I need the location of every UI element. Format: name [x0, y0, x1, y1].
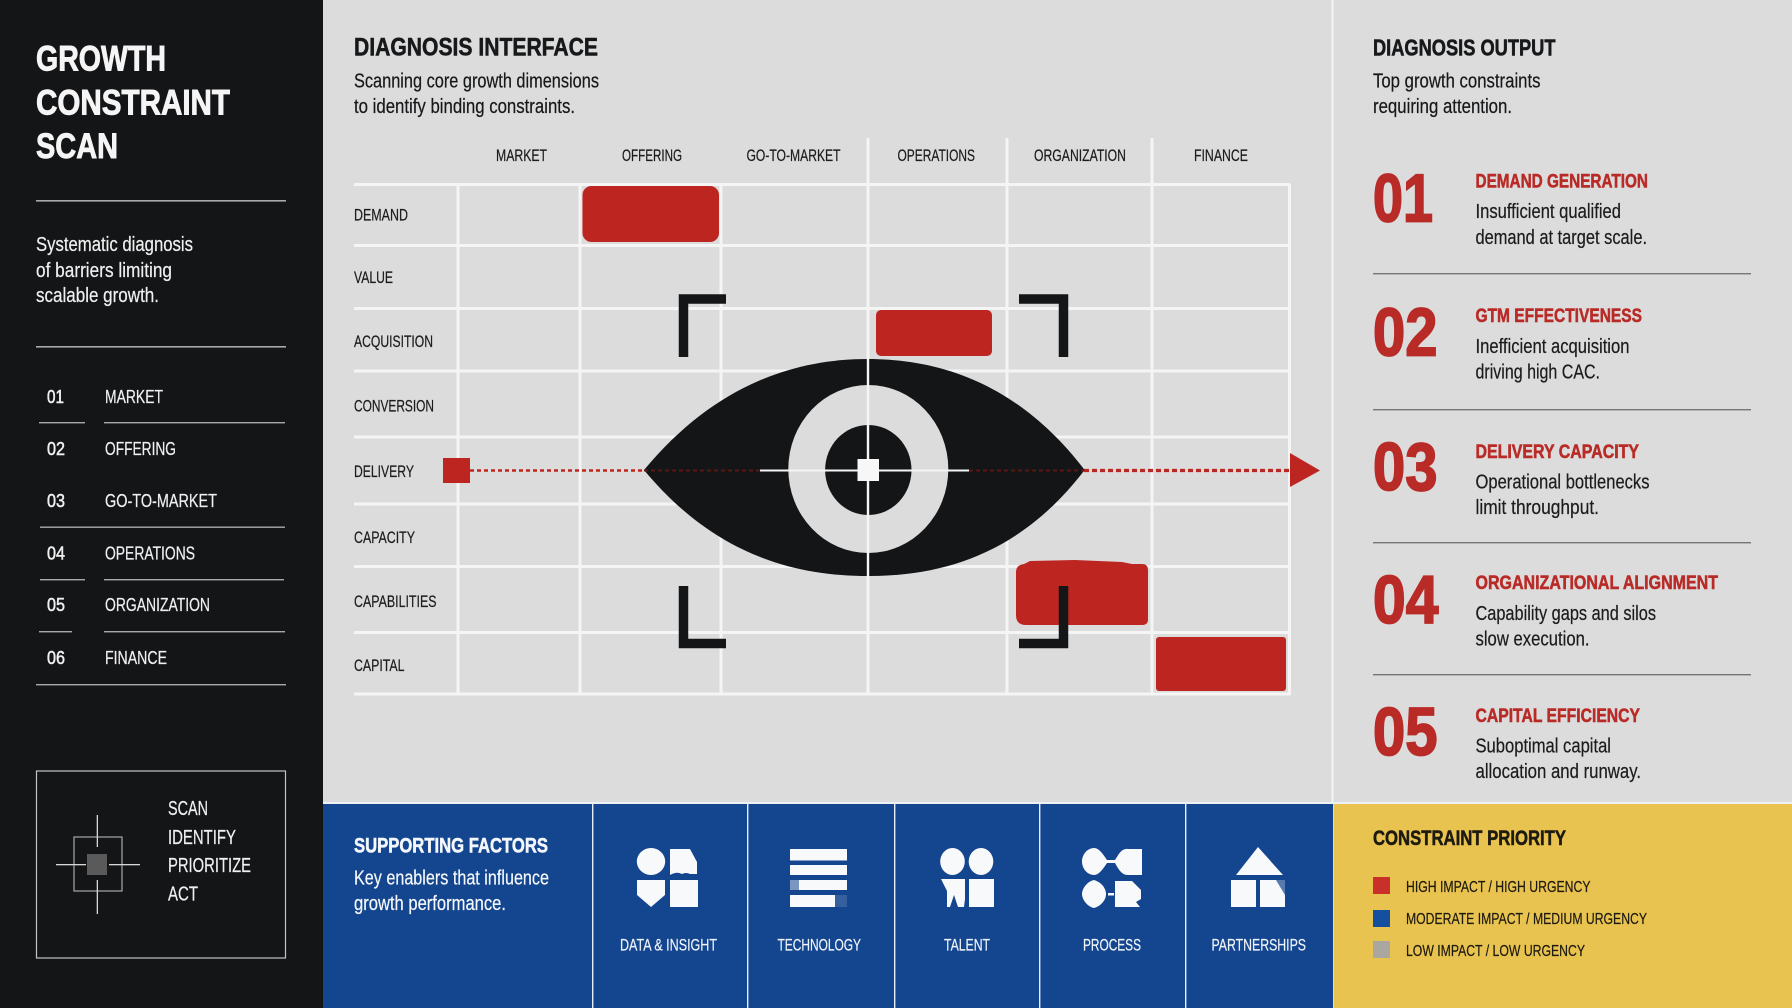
legend: MODERATE IMPACT / MEDIUM URGENCY	[1406, 911, 1647, 928]
output item 05: CAPITAL EFFICIENCY	[1476, 705, 1640, 727]
heading: diagnosis interface: Scanning core growth dimensions	[354, 70, 599, 92]
dimension list: OPERATIONS	[105, 544, 195, 564]
panel: supporting factors	[323, 802, 1792, 1008]
process steps	[168, 798, 251, 906]
output item 01: Insufficient qualified	[1476, 201, 1621, 223]
label: data and insight: DATA & INSIGHT	[620, 936, 717, 954]
row labels: DEMAND	[354, 206, 408, 224]
output item 04: slow execution.	[1476, 628, 1590, 650]
dimension list: OFFERING	[105, 439, 176, 459]
icon: eye	[644, 359, 1085, 576]
process steps: ACT	[168, 884, 198, 906]
title: SCAN	[36, 127, 118, 166]
heading: constraint priority: CONSTRAINT PRIORITY	[1373, 826, 1566, 850]
output item 01: DEMAND GENERATION	[1476, 170, 1648, 192]
output item 03: DELIVERY CAPACITY	[1476, 441, 1639, 463]
dimension list	[36, 387, 286, 685]
output item 05	[1373, 694, 1641, 783]
supporting factors heading: growth performance.	[354, 893, 506, 915]
heading: diagnosis output	[1373, 34, 1556, 118]
output item 02: Inefficient acquisition	[1476, 336, 1630, 358]
output item 02: driving high CAC.	[1476, 362, 1600, 384]
icon: crosshair target	[56, 815, 140, 914]
label: talent: TALENT	[944, 936, 990, 954]
heading: diagnosis output: requiring attention.	[1373, 96, 1512, 118]
legend: LOW IMPACT / LOW URGENCY	[1406, 943, 1585, 960]
title: CONSTRAINT	[36, 84, 230, 122]
output item 02: 02	[1373, 294, 1438, 370]
dimension list: 05	[47, 595, 65, 615]
dimension list: 02	[47, 439, 65, 459]
heading: diagnosis interface	[354, 34, 599, 118]
dimension list: 03	[47, 491, 65, 511]
output item 01	[1373, 160, 1648, 249]
title: GROWTH	[36, 40, 166, 78]
output item 02: GTM EFFECTIVENESS	[1476, 305, 1642, 327]
column headers: OPERATIONS	[898, 147, 975, 165]
dimension list: GO-TO-MARKET	[105, 491, 217, 511]
icon: process	[1082, 848, 1142, 908]
row labels: CAPACITY	[354, 529, 415, 547]
label: process: PROCESS	[1083, 936, 1141, 954]
dimension list: 04	[47, 544, 65, 564]
column headers: MARKET	[496, 147, 547, 165]
column headers: FINANCE	[1194, 147, 1248, 165]
dimension list: ORGANIZATION	[105, 595, 210, 615]
output item 05: 05	[1373, 694, 1438, 770]
dimension list: 01	[47, 387, 64, 407]
column headers: GO-TO-MARKET	[746, 147, 840, 165]
process steps: SCAN	[168, 798, 208, 820]
sidebar description: of barriers limiting	[36, 260, 172, 282]
row labels	[354, 206, 436, 675]
panel: left sidebar	[0, 0, 323, 1008]
output item 05: allocation and runway.	[1476, 761, 1641, 783]
heading: diagnosis interface: DIAGNOSIS INTERFACE	[354, 34, 598, 62]
dimension list: FINANCE	[105, 648, 167, 668]
legend: HIGH IMPACT / HIGH URGENCY	[1406, 879, 1591, 896]
icon: technology	[790, 849, 847, 907]
sidebar description	[36, 234, 193, 307]
supporting factors heading	[354, 834, 549, 915]
heading: diagnosis output: DIAGNOSIS OUTPUT	[1373, 34, 1556, 60]
sidebar description: Systematic diagnosis	[36, 234, 193, 256]
panel: constraint priority	[1334, 804, 1792, 1008]
dimension list: 06	[47, 648, 65, 668]
output item 04: 04	[1373, 562, 1439, 638]
row labels: CAPITAL	[354, 657, 404, 675]
row labels: ACQUISITION	[354, 333, 433, 351]
row labels: CAPABILITIES	[354, 593, 436, 611]
panel: diagnosis output	[1332, 0, 1751, 803]
icon: data and insight	[637, 848, 698, 907]
heading: diagnosis output: Top growth constraints	[1373, 70, 1540, 92]
output item 04	[1373, 562, 1718, 650]
scan line	[443, 453, 1320, 487]
row labels: CONVERSION	[354, 398, 434, 416]
title	[36, 40, 230, 166]
icon: partnerships	[1231, 847, 1285, 907]
output item 03: 03	[1373, 429, 1438, 505]
row labels: VALUE	[354, 269, 393, 287]
output item 02	[1373, 294, 1642, 384]
label: partnerships: PARTNERSHIPS	[1212, 936, 1306, 954]
output item 04: Capability gaps and silos	[1476, 603, 1656, 625]
legend	[1373, 877, 1647, 960]
chart: constraint scan matrix	[354, 138, 1320, 695]
output item 01: demand at target scale.	[1476, 227, 1647, 249]
output item 04: ORGANIZATIONAL ALIGNMENT	[1476, 572, 1718, 594]
column headers: OFFERING	[622, 147, 682, 165]
supporting factors heading: Key enablers that influence	[354, 868, 549, 890]
output item 05: Suboptimal capital	[1476, 736, 1611, 758]
sidebar description: scalable growth.	[36, 285, 159, 307]
dimension list: MARKET	[105, 387, 163, 407]
output item 01: 01	[1373, 160, 1433, 236]
column headers: ORGANIZATION	[1034, 147, 1126, 165]
process steps: PRIORITIZE	[168, 855, 251, 877]
label: technology: TECHNOLOGY	[778, 936, 861, 954]
output item 03: Operational bottlenecks	[1476, 472, 1650, 494]
output item 03	[1373, 429, 1650, 519]
output item 03: limit throughput.	[1476, 497, 1599, 519]
process box	[36, 771, 286, 958]
heading: diagnosis interface: to identify binding constraints.	[354, 96, 575, 118]
icon: talent	[940, 848, 994, 907]
row labels: DELIVERY	[354, 463, 414, 481]
scan brackets	[684, 299, 1064, 644]
process steps: IDENTIFY	[168, 827, 236, 849]
supporting factors heading: SUPPORTING FACTORS	[354, 834, 548, 858]
column headers	[496, 147, 1248, 165]
red constraint cells	[582, 186, 1286, 691]
